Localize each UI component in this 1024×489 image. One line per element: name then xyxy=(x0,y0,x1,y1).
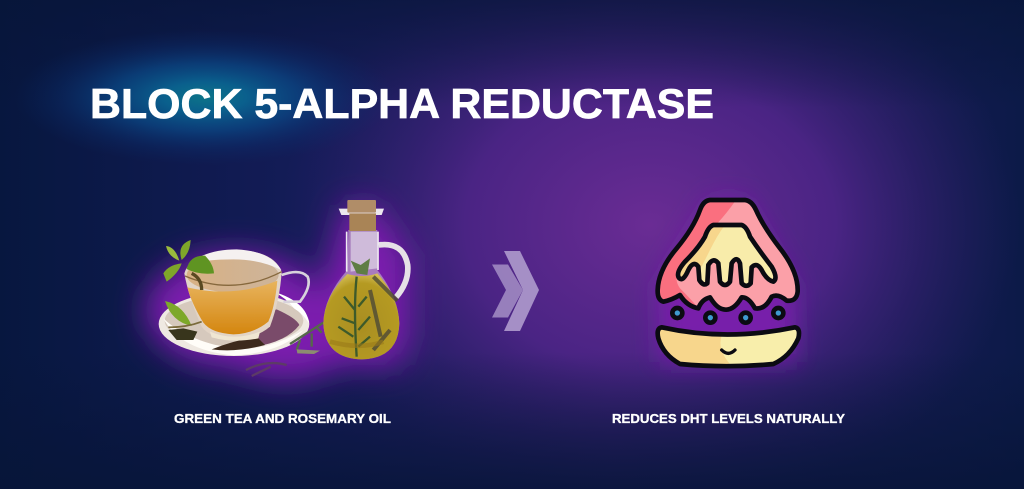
enzyme inner pocket xyxy=(678,225,775,286)
enzyme glow xyxy=(658,200,797,362)
caption: reduces DHT levels naturally: REDUCES DHT LEVELS NATURALLY xyxy=(612,411,845,426)
icon: enzyme xyxy=(658,200,799,366)
icon: loose tea xyxy=(168,309,299,350)
title: BLOCK 5-ALPHA REDUCTASE xyxy=(90,80,714,127)
icon: saucer xyxy=(159,292,309,356)
caption: green tea and rosemary oil: GREEN TEA AND ROSEMARY OIL xyxy=(174,411,391,426)
icon: leaves xyxy=(163,240,214,327)
substrate dots xyxy=(672,308,783,323)
arrow: double chevron xyxy=(492,251,539,331)
icon: teacup xyxy=(184,249,309,341)
enzyme upper body xyxy=(658,200,798,310)
icon: rosemary sprig xyxy=(246,323,323,376)
icon: oil bottle xyxy=(323,200,408,359)
illustration: tea and rosemary oil xyxy=(159,200,408,376)
enzyme lower body xyxy=(658,327,799,366)
product glow xyxy=(145,205,410,380)
